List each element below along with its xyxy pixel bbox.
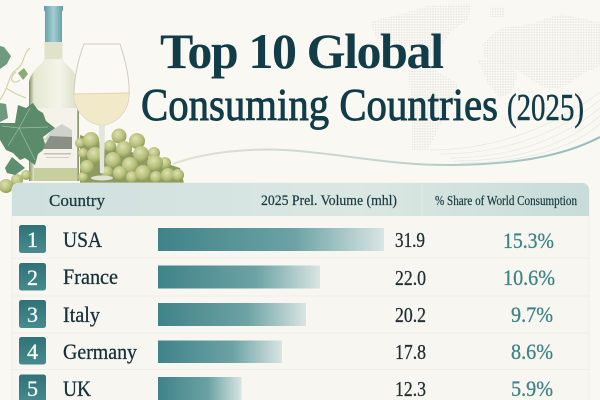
icon: lower leaf: [5, 157, 25, 175]
dotted world map: [370, 4, 600, 150]
icon: tiny leaf: [18, 68, 28, 80]
title line 2: Consuming Countries: [141, 79, 498, 130]
header: volume: 2025 Prel. Volume (mhl): [261, 193, 397, 209]
row 2: 10.6%: [503, 265, 555, 290]
bottle label: [34, 108, 77, 168]
row 2: 2: [27, 265, 38, 290]
wave ribbon: [173, 137, 600, 165]
swoosh lines: [430, 92, 600, 163]
row 3: [19, 300, 553, 328]
illustration: wine glass: [74, 44, 129, 125]
row 4: 4: [27, 339, 38, 364]
row 1: [19, 225, 554, 253]
row 5: [19, 374, 553, 400]
header: country: Country: [49, 191, 105, 210]
row 3: 3: [27, 302, 38, 327]
illustration: vine tendrils: [0, 48, 30, 100]
row 1: USA: [63, 227, 102, 252]
row 4: Germany: [63, 339, 137, 364]
row 1: 1: [27, 227, 38, 252]
title line 1: Top 10 Global: [160, 23, 444, 79]
table panel: [12, 183, 589, 400]
row 1: 15.3%: [503, 228, 554, 253]
illustration: wine bottle: [29, 6, 79, 181]
icon: small leaf: [0, 46, 11, 69]
row 3: Italy: [63, 302, 100, 327]
row 1: 31.9: [395, 228, 425, 252]
table header: [12, 183, 589, 216]
icon: leaf behind: [0, 103, 8, 122]
title: [141, 23, 584, 130]
glass stem and foot: [91, 125, 113, 180]
row 4: 17.8: [395, 340, 426, 364]
row 4: 8.6%: [511, 339, 553, 364]
row 4: [19, 337, 553, 364]
row separators: [12, 258, 589, 370]
row 3: 9.7%: [511, 302, 553, 327]
row 3: 20.2: [395, 303, 426, 327]
icon: large grape leaf: [0, 103, 55, 165]
row 2: 22.0: [395, 266, 426, 290]
row 2: [19, 263, 555, 290]
row 2: France: [63, 264, 118, 289]
illustration: grapes: [0, 128, 184, 193]
